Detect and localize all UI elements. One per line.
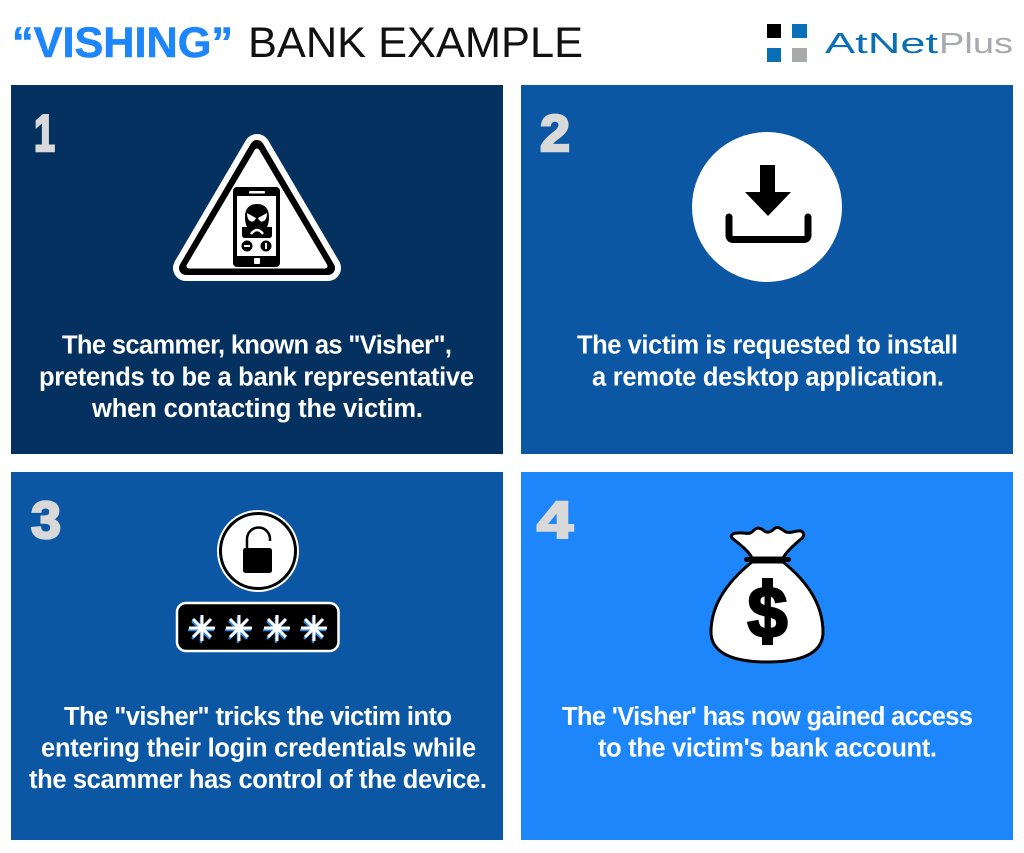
panel: step 3 — [11, 472, 503, 840]
description text 4: to the victim's bank account. — [598, 734, 937, 762]
description text 1: The scammer, known as "Visher", — [62, 332, 452, 360]
description text 4: The 'Visher' has now gained access — [562, 703, 973, 731]
title — [12, 19, 583, 67]
icon: warning triangle with scammer phone — [186, 147, 328, 268]
description text 1 — [39, 332, 474, 423]
description text 3 — [29, 703, 487, 794]
description text 1: when contacting the victim. — [91, 395, 423, 423]
description text 3: the scammer has control of the device. — [29, 766, 487, 794]
description text 2: The victim is requested to install — [577, 332, 958, 360]
step number 2: 2 — [540, 105, 570, 163]
title: BANK EXAMPLE — [248, 19, 583, 67]
icon: password field with asterisks — [177, 603, 338, 651]
step number 1: 1 — [34, 105, 55, 163]
description text 2: a remote desktop application. — [592, 364, 944, 392]
icon: download — [692, 132, 842, 282]
panel: step 1 — [11, 85, 503, 454]
icon: money bag: $ — [747, 573, 788, 653]
panel: step 2 — [521, 85, 1013, 454]
logo: AtNetPlus: AtNet — [825, 28, 938, 60]
description text 2 — [577, 332, 958, 392]
panel: step 4 — [521, 472, 1013, 840]
step number 4: 4 — [537, 492, 573, 550]
description text 4 — [562, 703, 973, 762]
description text 3: The "visher" tricks the victim into — [64, 703, 452, 731]
logo: AtNetPlus — [767, 24, 1013, 62]
logo: AtNetPlus: Plus — [939, 28, 1013, 60]
description text 3: entering their login credentials while — [41, 734, 476, 762]
step number 3: 3 — [31, 492, 61, 550]
icon: open padlock — [217, 510, 299, 592]
icon: money bag — [711, 527, 823, 662]
title: “VISHING” — [12, 19, 233, 67]
description text 1: pretends to be a bank representative — [39, 364, 474, 392]
